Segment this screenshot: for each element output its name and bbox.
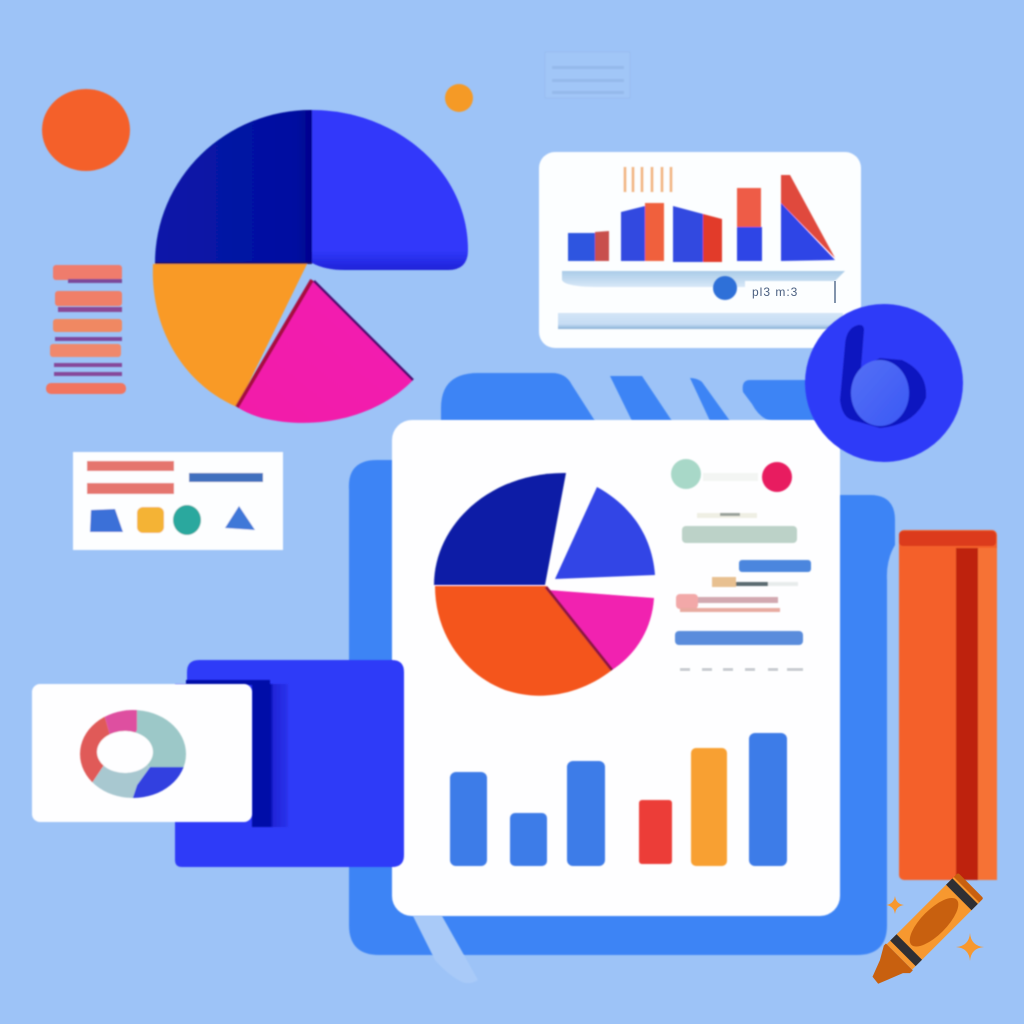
faint lines panel xyxy=(545,52,630,98)
small label: pl3 m:3 xyxy=(752,285,798,299)
top right bar chart card xyxy=(539,152,861,348)
legend: grey ticks xyxy=(680,668,803,671)
stacked stripe list xyxy=(46,265,126,394)
crayon oval xyxy=(903,891,965,954)
donut chart xyxy=(79,709,187,799)
legend: grey strip xyxy=(682,513,797,543)
crayon body xyxy=(887,877,979,970)
large pie chart xyxy=(153,110,468,423)
orange column xyxy=(899,530,997,880)
report bar chart xyxy=(450,733,787,866)
legend: tan label xyxy=(712,577,798,587)
blue tabs behind main page xyxy=(441,373,815,421)
legend: green and red dots xyxy=(671,459,792,492)
crayon icon xyxy=(862,872,984,994)
blue backing panel xyxy=(349,460,895,955)
crayon bands xyxy=(890,878,978,966)
legend: blue label xyxy=(739,560,811,572)
legend: red label xyxy=(676,594,780,612)
sparkle large xyxy=(956,933,984,961)
small legend card xyxy=(73,452,283,550)
legend: blue bar label xyxy=(675,631,803,645)
slider strip xyxy=(562,271,845,287)
lower strip xyxy=(558,313,843,329)
small orange dot xyxy=(445,84,473,112)
donut chart card xyxy=(32,684,252,822)
blue square panel xyxy=(175,660,404,867)
sparkle small xyxy=(886,896,904,914)
large orange circle xyxy=(42,89,130,171)
slider knob xyxy=(713,276,737,300)
orange tick marks xyxy=(625,167,671,192)
stacked bars xyxy=(568,175,835,262)
small label xyxy=(752,281,835,303)
main report page xyxy=(392,420,840,916)
light diagonal accent xyxy=(413,916,478,983)
crayon cap xyxy=(952,873,984,904)
card shadow xyxy=(186,680,288,827)
crayon tip xyxy=(862,943,913,994)
blue circular badge xyxy=(805,304,963,462)
report pie chart xyxy=(434,473,655,696)
